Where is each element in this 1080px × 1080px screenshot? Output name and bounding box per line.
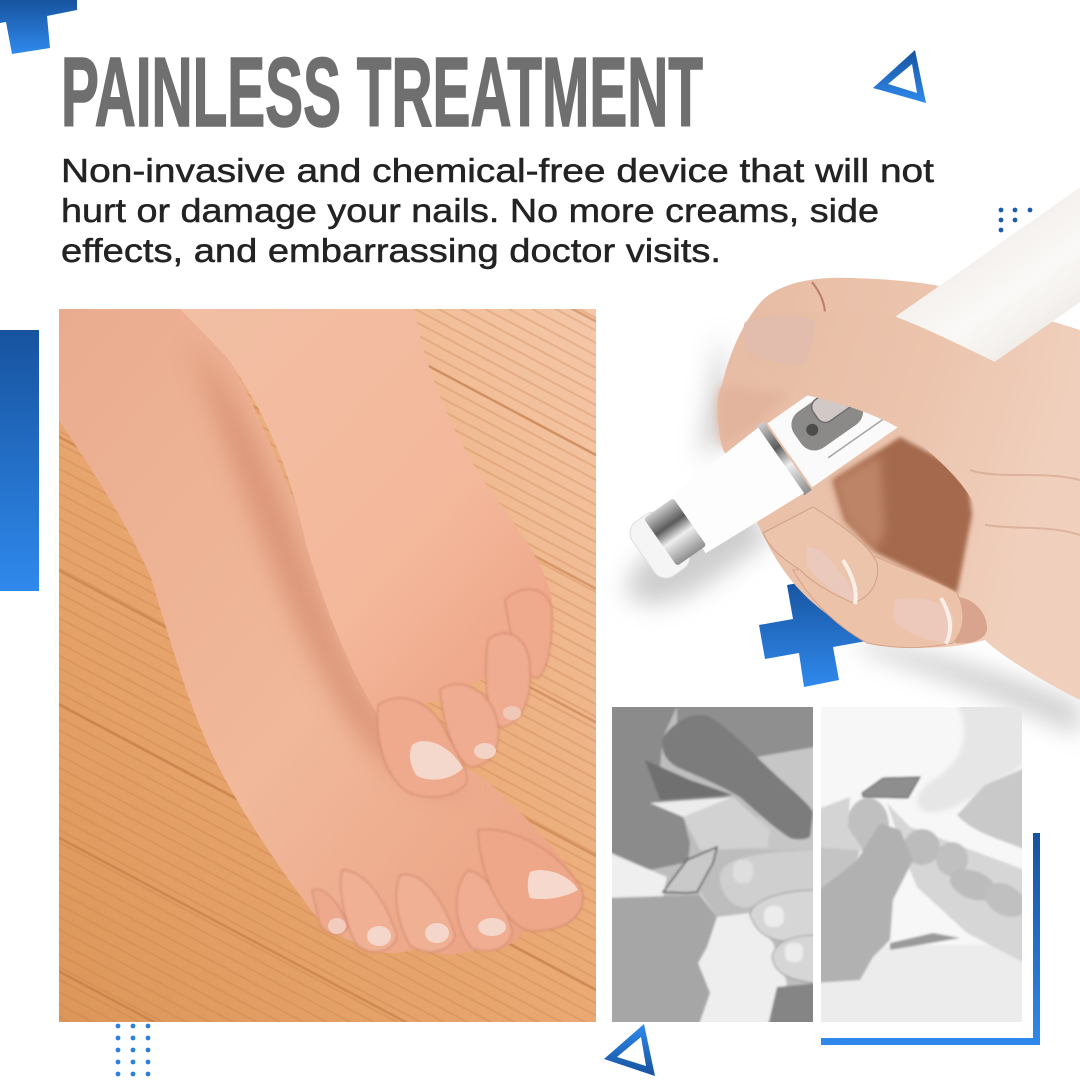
icon: blue plus by hand [759,578,872,687]
background [676,707,813,758]
tissue [697,893,787,1030]
description text: effects, and embarrassing doctor visits. [61,232,721,269]
photo: grey foot with clippers [821,707,1022,1022]
photo: grey nail clipping procedure [612,707,813,1022]
dark cloth [768,982,813,1022]
left sheet [612,852,668,899]
photo: feet on bamboo mat [59,309,596,1022]
metal ring [756,421,812,495]
foot [758,746,813,849]
index finger [763,507,878,603]
icon: triangle top right [873,50,926,103]
decorative dots top right [999,208,1032,232]
device: pen [614,162,1080,591]
upper foot toes [377,589,552,797]
big toe [847,798,889,852]
lower foot [59,309,583,954]
shadow between feet [198,362,386,771]
second foot [815,823,913,983]
decorative dots bottom left [116,1024,150,1076]
upper foot [180,309,552,715]
treated toe [683,797,770,850]
clippers [663,847,717,893]
glove top right [917,707,1022,812]
shadow under foot [890,933,960,950]
sheet above toe [650,797,733,817]
left side shading [718,385,790,447]
control section [767,352,915,487]
glove index finger [662,715,813,839]
glove palm [612,707,730,870]
left blue bar [0,330,39,591]
L-shaped blue frame [821,833,1040,1045]
hand base [718,278,1080,700]
toes [720,850,820,908]
foot sole [887,803,1030,966]
upper foot nails [410,741,463,780]
pen drop shadow [625,330,1080,735]
lower foot toes [312,829,583,952]
far body [854,162,1080,423]
far finger [955,597,987,643]
palm shadow [833,437,972,593]
description text: Non-invasive and chemical-free device that will not [61,152,934,189]
thumb [742,311,1080,623]
clippers [862,777,920,798]
toes row [904,829,940,865]
tip cap [625,507,695,584]
icon: triangle bottom [604,1024,655,1076]
metal collar [644,498,706,566]
white body [664,427,804,559]
icon: blue plus top left [0,0,77,54]
description text: hurt or damage your nails. No more creams, side [61,192,879,229]
back finger crease [812,282,825,315]
description text [61,152,934,269]
control panel [785,379,869,457]
lower foot nails [528,870,578,899]
hand holding device [718,278,1080,700]
ring finger [793,556,963,648]
lower glove [612,894,718,1022]
